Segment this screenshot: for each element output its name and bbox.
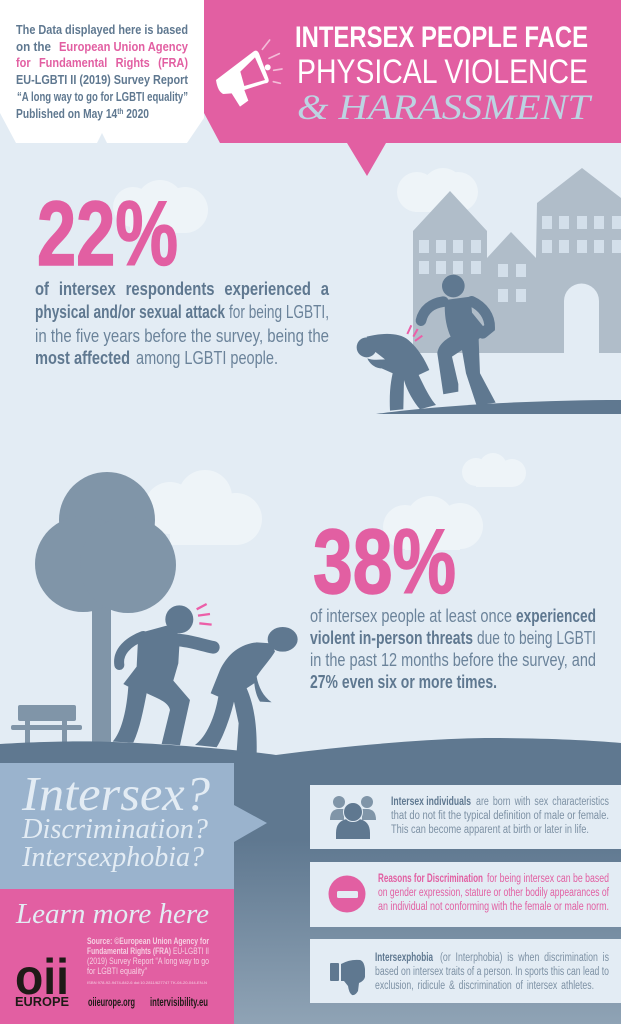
text block: 38% description: 27% even six or more times.: [310, 672, 497, 692]
text block: 38% description: of intersex people at least once: [310, 606, 512, 626]
panel: intersexphobia: [310, 939, 621, 1003]
stat: 38%: 38%: [313, 511, 456, 613]
title banner: & HARASSMENT: [297, 87, 593, 127]
cloud: behind tree: [144, 470, 262, 545]
ground: upper hill: [376, 400, 621, 414]
source note panel: 2020: [123, 107, 149, 121]
source credit: Fundamental Rights (FRA): [87, 946, 171, 957]
illustration: buildings: [413, 168, 621, 353]
source note panel: EU-LGBTI II (2019) Survey Report: [16, 73, 189, 87]
text block: 38% description: [310, 606, 596, 692]
source credit: ISBN 978-92-9474-842-6 doi:10.2811/627747 TK-04-20-044-EN-N: [87, 980, 207, 985]
illustration: tree: [35, 472, 176, 745]
text block: 38% description: violent in-person threats: [310, 628, 473, 648]
source credit: EU-LGBTI II: [173, 946, 209, 957]
cloud: behind buildings: [397, 168, 478, 212]
links: intervisibility.eu: [150, 997, 208, 1009]
text block: 22% description: in the five years before the survey, being the: [35, 326, 329, 346]
icon: no-entry sign: [328, 876, 366, 912]
panel: intersexphobia: Intersexphobia: [375, 952, 433, 964]
source note panel: [0, 0, 204, 143]
links: [88, 997, 208, 1009]
panel: reasons for discrimination: [310, 862, 621, 927]
panel: reasons for discrimination: Reasons for Discrimination: [378, 873, 483, 885]
text block: 22% description: of intersex respondents experienced a: [35, 279, 330, 299]
icon: thumbs down: [330, 960, 365, 995]
panel: questions: Intersex?: [21, 766, 211, 821]
logo: OII Europe: EUROPE: [15, 994, 69, 1009]
source credit: Source: ©European Union Agency for: [87, 936, 209, 947]
cloud: behind 38%: [383, 496, 483, 550]
source credit: [87, 936, 209, 985]
icon: megaphone: [216, 40, 282, 107]
panel: questions: Discrimination?: [21, 814, 208, 845]
ground: lower hill: [0, 738, 621, 1024]
panel: learn more: Learn more here: [15, 899, 209, 930]
source note panel: “A long way to go for LGBTI equality”: [17, 90, 188, 104]
source credit: for LGBTI equality”: [87, 966, 147, 977]
text block: 22% description: physical and/or sexual attack: [35, 302, 226, 322]
source note panel: for Fundamental Rights (FRA): [16, 56, 188, 70]
illustration: attacker and victim: [357, 275, 496, 411]
text block: 22% description: for being LGBTI,: [229, 302, 329, 322]
stat: 22%: 22%: [37, 183, 178, 285]
illustration: threatening figures: [113, 604, 298, 753]
cloud: small upper right: [462, 453, 526, 487]
source note panel: Published on May 14: [16, 107, 140, 121]
text block: 38% description: experienced: [516, 606, 596, 626]
panel: intersex individuals: Intersex individuals: [391, 796, 471, 808]
source note panel: on the: [16, 40, 51, 54]
icon: people: [330, 796, 376, 839]
cloud: behind 22%: [113, 180, 208, 233]
source note panel: th: [117, 107, 123, 116]
source note panel: European Union Agency: [59, 40, 188, 54]
panel: learn more: [0, 889, 234, 1024]
text block: 22% description: [35, 279, 330, 368]
panel: questions: Intersexphobia?: [21, 842, 204, 873]
source note panel: The Data displayed here is based: [16, 23, 188, 37]
source credit: (2019) Survey Report “A long way to go: [87, 956, 209, 967]
panel: intersex individuals: [310, 785, 621, 849]
title banner: [204, 0, 621, 176]
panel: questions: [0, 763, 267, 889]
links: oiieurope.org: [88, 997, 135, 1009]
logo: OII Europe: oii: [15, 949, 69, 1005]
illustration: bench: [11, 705, 82, 744]
text block: 22% description: most affected: [35, 348, 130, 368]
text block: 22% description: among LGBTI people.: [136, 348, 278, 368]
